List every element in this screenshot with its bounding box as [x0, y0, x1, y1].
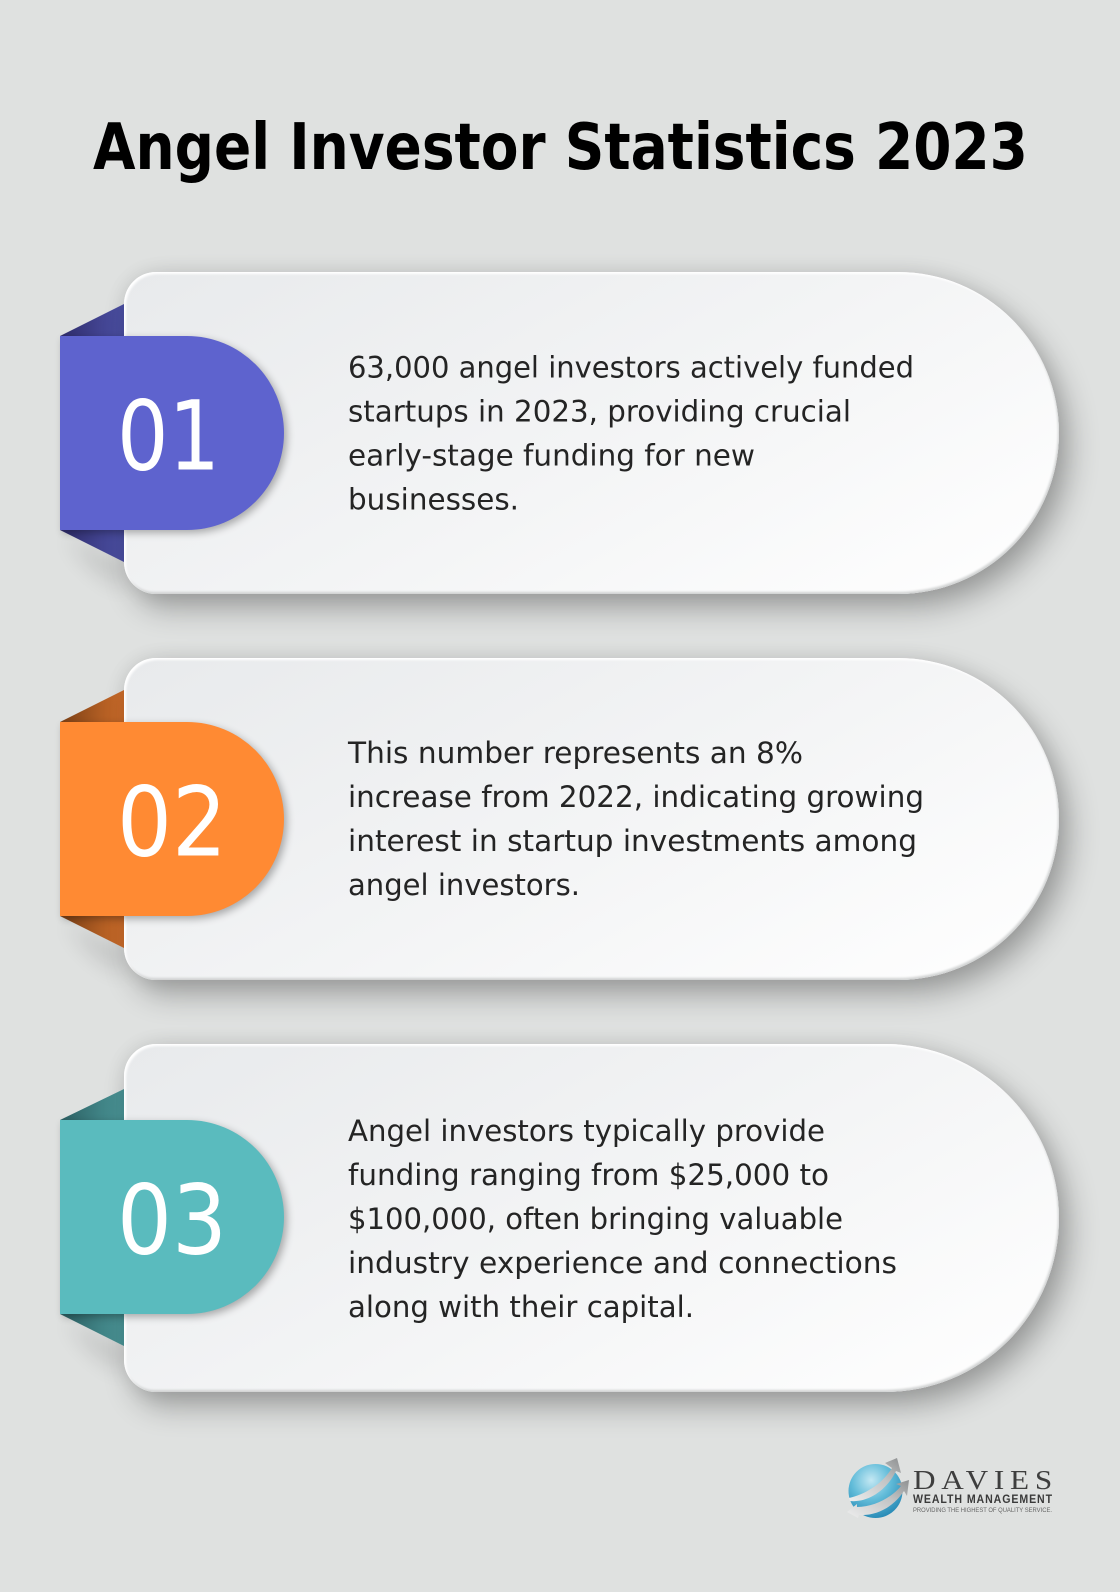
- text block 02: interest in startup investments among: [348, 824, 917, 858]
- badge 02: [60, 722, 284, 916]
- text block 01: businesses.: [348, 482, 519, 516]
- text block 02: increase from 2022, indicating growing: [348, 780, 924, 814]
- icon: ribbon fold top and bottom: [60, 304, 126, 586]
- text block 02: This number represents an 8%: [347, 736, 803, 770]
- number 02: 02: [117, 766, 227, 878]
- panel: statistic 03: [58, 1036, 1085, 1422]
- text block 03: along with their capital.: [348, 1290, 694, 1324]
- logo wordmark: [913, 1465, 1058, 1514]
- badge 03: [60, 1120, 284, 1314]
- logo wordmark: PROVIDING THE HIGHEST OF QUALITY SERVICE.: [913, 1507, 1052, 1514]
- card background: [124, 1044, 1059, 1392]
- text block 03: funding ranging from $25,000 to: [348, 1158, 829, 1192]
- text block 02: angel investors.: [348, 868, 580, 902]
- card background: [124, 272, 1059, 594]
- panel: statistic 01: [58, 264, 1085, 624]
- icon: ribbon fold top and bottom: [60, 1089, 124, 1370]
- number 03: 03: [117, 1164, 227, 1276]
- number 01: 01: [117, 380, 220, 492]
- text block 03: Angel investors typically provide: [348, 1114, 825, 1148]
- text block 01: startups in 2023, providing crucial: [348, 394, 851, 428]
- icon: globe with arrows: [847, 1458, 909, 1518]
- badge 01: [60, 336, 284, 530]
- text block 03: [348, 1114, 897, 1324]
- text block 02: [347, 736, 924, 902]
- logo wordmark: DAVIES: [913, 1465, 1058, 1495]
- title: Angel Investor Statistics 2023: [93, 111, 1028, 185]
- logo wordmark: WEALTH MANAGEMENT: [913, 1494, 1053, 1506]
- logo: Davies Wealth Management: [848, 1458, 1058, 1518]
- card background: [124, 658, 1059, 980]
- text block 01: [348, 350, 914, 516]
- text block 03: industry experience and connections: [348, 1246, 897, 1280]
- panel: statistic 02: [58, 650, 1085, 1010]
- text block 03: $100,000, often bringing valuable: [348, 1202, 843, 1236]
- text block 01: 63,000 angel investors actively funded: [348, 350, 914, 384]
- icon: ribbon fold top and bottom: [60, 690, 126, 972]
- text block 01: early-stage funding for new: [348, 438, 755, 472]
